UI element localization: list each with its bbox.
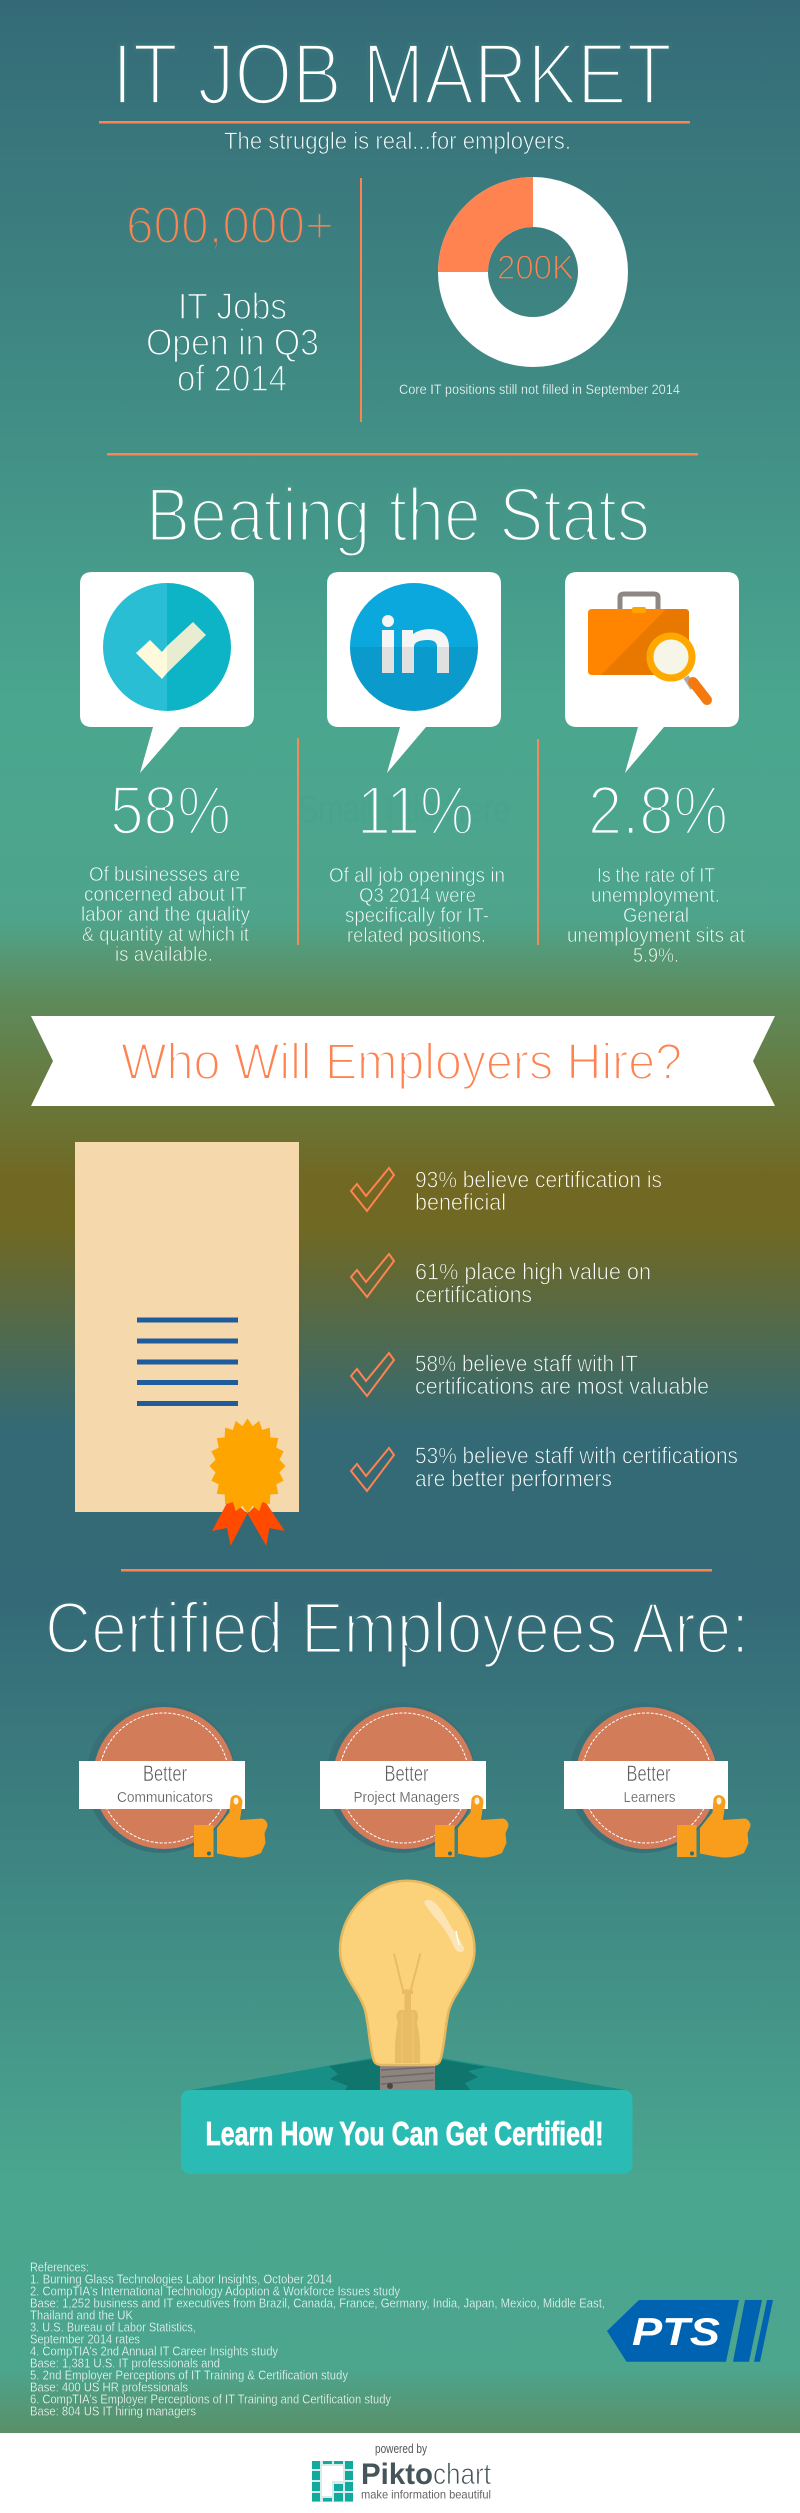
panel: 58% [80,572,254,966]
description [329,865,505,947]
badge: better project managers [320,1703,508,1858]
references [30,2260,605,2419]
badge: better communicators [79,1703,268,1858]
description: related positions. [347,925,486,947]
description: labor and the quality [81,904,250,926]
stat divider [360,178,362,422]
checklist item 4: are better performers [415,1466,612,1492]
stat: 600,000+ IT jobs: Open in Q3 [146,322,319,363]
footer band [0,2433,800,2513]
logo: PTS: PTS [632,2311,720,2354]
checklist item 3 [351,1350,709,1399]
column divider [297,738,299,945]
checklist item 3: 58% believe staff with IT [415,1350,638,1376]
footer: powered by piktochart [312,2441,492,2502]
speech bubble with check icon [80,572,254,773]
donut caption: Core IT positions still not filled in September 2014 [399,381,680,397]
badge: better communicators: Better [143,1761,187,1786]
references: 2. CompTIA's International Technology Adoption & Workforce Issues study [30,2284,400,2299]
icon: light bulb [191,1881,625,2090]
value: 2.8% [588,772,728,849]
ghost caption: Small Title Here [298,789,510,831]
footer: powered by piktochart: powered by [375,2441,427,2456]
donut chart [438,177,603,342]
icon: thumbs up [194,1795,268,1858]
checklist item 2: certifications [415,1282,532,1308]
description: specifically for IT- [345,905,489,927]
description [81,864,250,966]
references: September 2014 rates [30,2332,140,2347]
ribbon banner: Who Will Employers Hire? [121,1033,682,1090]
references: 3. U.S. Bureau of Labor Statistics, [30,2320,196,2335]
stat: 600,000+ IT jobs [126,197,334,399]
value: 58% [110,772,231,849]
stat: 600,000+ IT jobs: of 2014 [177,358,287,399]
heading: beating the stats: Beating the Stats [146,473,650,558]
description: Of all job openings in [329,865,505,887]
references: Base: 400 US HR professionals [30,2380,188,2395]
icon: thumbs up [435,1795,508,1858]
references: 6. CompTIA's Employer Perceptions of IT Training and Certification study [30,2392,391,2407]
references: 1. Burning Glass Technologies Labor Insights, October 2014 [30,2272,332,2287]
description: is available. [115,944,213,966]
speech bubble with briefcase icon [565,572,739,773]
description: Is the rate of IT [597,865,715,887]
description: concerned about IT [84,884,247,906]
footer: powered by piktochart: Pikto [361,2458,433,2491]
references: Thailand and the UK [30,2308,133,2323]
footer: powered by piktochart: chart [433,2458,492,2491]
footer: powered by piktochart: make information beautiful [361,2488,491,2502]
stat: 600,000+ IT jobs: 600,000+ [126,197,334,255]
checklist item 4: 53% believe staff with certifications [415,1442,738,1468]
icon: piktochart mark [312,2461,353,2502]
references: Base: 804 US IT hiring managers [30,2404,196,2419]
references: 4. CompTIA's 2nd Annual IT Career Insights study [30,2344,278,2359]
stat: 600,000+ IT jobs: IT Jobs [178,286,287,327]
references: Base: 1,252 business and IT executives from Brazil, Canada, France, Germany, India, Japan, Mexico, Middle East, [30,2296,605,2311]
icon: certificate [75,1142,299,1546]
references: 5. 2nd Employer Perceptions of IT Training & Certification study [30,2368,348,2383]
section rule [121,1569,712,1572]
checklist item 3: certifications are most valuable [415,1373,709,1399]
references: Base: 1,381 U.S. IT professionals and [30,2356,220,2371]
checklist item 1: 93% believe certification is [415,1166,662,1192]
call to action button: Learn How You Can Get Certified! [206,2115,604,2152]
call to action button [181,2090,632,2174]
description: unemployment sits at [567,925,745,947]
section rule [107,453,698,456]
logo: PTS [607,2300,773,2362]
badge: better project managers: Better [384,1761,428,1786]
column divider [537,739,539,945]
title: IT JOB MARKET [112,26,672,123]
checklist item 2: 61% place high value on [415,1258,651,1284]
description: Of businesses are [89,864,240,886]
description: Q3 2014 were [359,885,476,907]
speech bubble with linkedin icon [327,572,501,773]
panel: 11% [298,572,510,947]
description: 5.9%. [633,945,679,967]
panel: 2.8% [565,572,745,967]
title rule [99,121,690,124]
donut chart: 200K [497,249,574,287]
description: & quantity at which it [82,924,249,946]
checklist item 1: beneficial [415,1189,506,1215]
badge: better learners: Learners [624,1789,676,1806]
description: General [623,905,689,927]
ribbon banner [31,1016,775,1106]
references: References: [30,2260,89,2275]
badge: better learners: Better [626,1761,670,1786]
subtitle: The struggle is real...for employers. [224,128,571,155]
icon: thumbs up [677,1795,750,1858]
badge: better learners [564,1703,750,1858]
description: unemployment. [591,885,720,907]
checklist item 4 [351,1442,738,1492]
checklist item 1 [351,1166,662,1215]
checklist item 2 [351,1254,651,1308]
badge: better communicators: Communicators [117,1789,213,1806]
badge: better project managers: Project Managers [354,1789,460,1806]
description [567,865,745,967]
value: 11% [357,772,474,849]
